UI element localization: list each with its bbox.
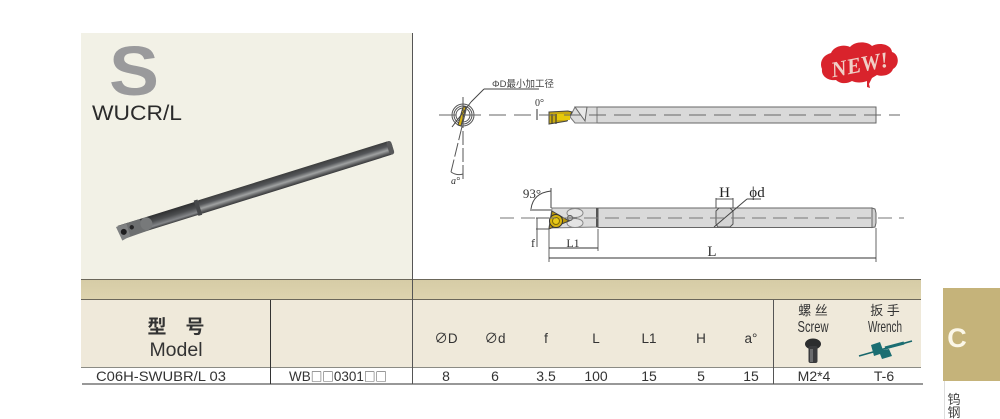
- icon: wrench: [859, 341, 912, 359]
- tan band: [81, 280, 921, 299]
- data row: 8: [442, 368, 450, 384]
- side tab C: C: [947, 323, 967, 353]
- label: phi d: ϕd: [749, 185, 765, 201]
- side label: [947, 392, 961, 419]
- wrench header: 扳 手: [870, 303, 900, 318]
- data row: WB□□0301□□: [289, 368, 387, 385]
- column headers: L: [592, 331, 600, 346]
- label: minimum machining diameter: ΦD最小加工径: [492, 78, 554, 90]
- column headers: [434, 331, 757, 346]
- model header: Model: [149, 339, 203, 361]
- dimension L: L: [707, 244, 717, 260]
- end view circle: [451, 89, 484, 180]
- data row: 5: [697, 368, 705, 384]
- data row: 15: [641, 368, 657, 384]
- side tab C: [943, 288, 1000, 419]
- label: H: H: [719, 185, 730, 201]
- dimension L1: [549, 229, 598, 262]
- side label: 钨: [947, 392, 961, 407]
- screw header: [798, 303, 829, 336]
- icon: screw: [805, 338, 821, 363]
- tool photo: [115, 139, 395, 241]
- label: zero degrees: 0°: [535, 98, 544, 109]
- series name WUCR/L: WUCR/L: [92, 101, 182, 125]
- model header: [147, 316, 205, 361]
- series letter S: S: [109, 32, 159, 110]
- table: [81, 33, 923, 385]
- model header: 型 号: [147, 316, 205, 338]
- column headers: f: [544, 331, 548, 346]
- dimension L1: L1: [566, 236, 580, 250]
- wrench header: Wrench: [868, 319, 902, 336]
- label: alpha angle: a°: [451, 176, 460, 187]
- icon: NEW badge: [821, 42, 898, 88]
- data row: 100: [584, 368, 608, 384]
- column headers: a°: [745, 331, 757, 346]
- column headers: L1: [641, 331, 657, 346]
- data row: [96, 368, 894, 385]
- data row: 6: [491, 368, 499, 384]
- drawing: top tool view: [439, 78, 900, 187]
- column headers: H: [696, 331, 706, 346]
- label: f: f: [531, 236, 535, 250]
- panel: product photo: [81, 32, 412, 280]
- data row: C06H-SWUBR/L 03: [96, 368, 226, 384]
- column headers: ∅d: [484, 331, 506, 346]
- data row: 15: [743, 368, 759, 384]
- data row: T-6: [874, 368, 894, 384]
- shank: [549, 208, 876, 228]
- screw header: 螺 丝: [798, 303, 828, 318]
- data row: M2*4: [798, 368, 831, 384]
- flat H: [716, 208, 733, 227]
- label: 93 degrees: 93°: [523, 186, 541, 201]
- wrench header: [868, 303, 902, 336]
- screw header: Screw: [798, 319, 829, 336]
- header row background: [81, 300, 921, 367]
- data row: 3.5: [536, 368, 556, 384]
- column headers: ∅D: [434, 331, 458, 346]
- carbide insert: [549, 211, 569, 229]
- icon: NEW badge: NEW!: [828, 47, 891, 83]
- drawing: front tool view: [500, 185, 904, 262]
- tool side view: [549, 107, 876, 124]
